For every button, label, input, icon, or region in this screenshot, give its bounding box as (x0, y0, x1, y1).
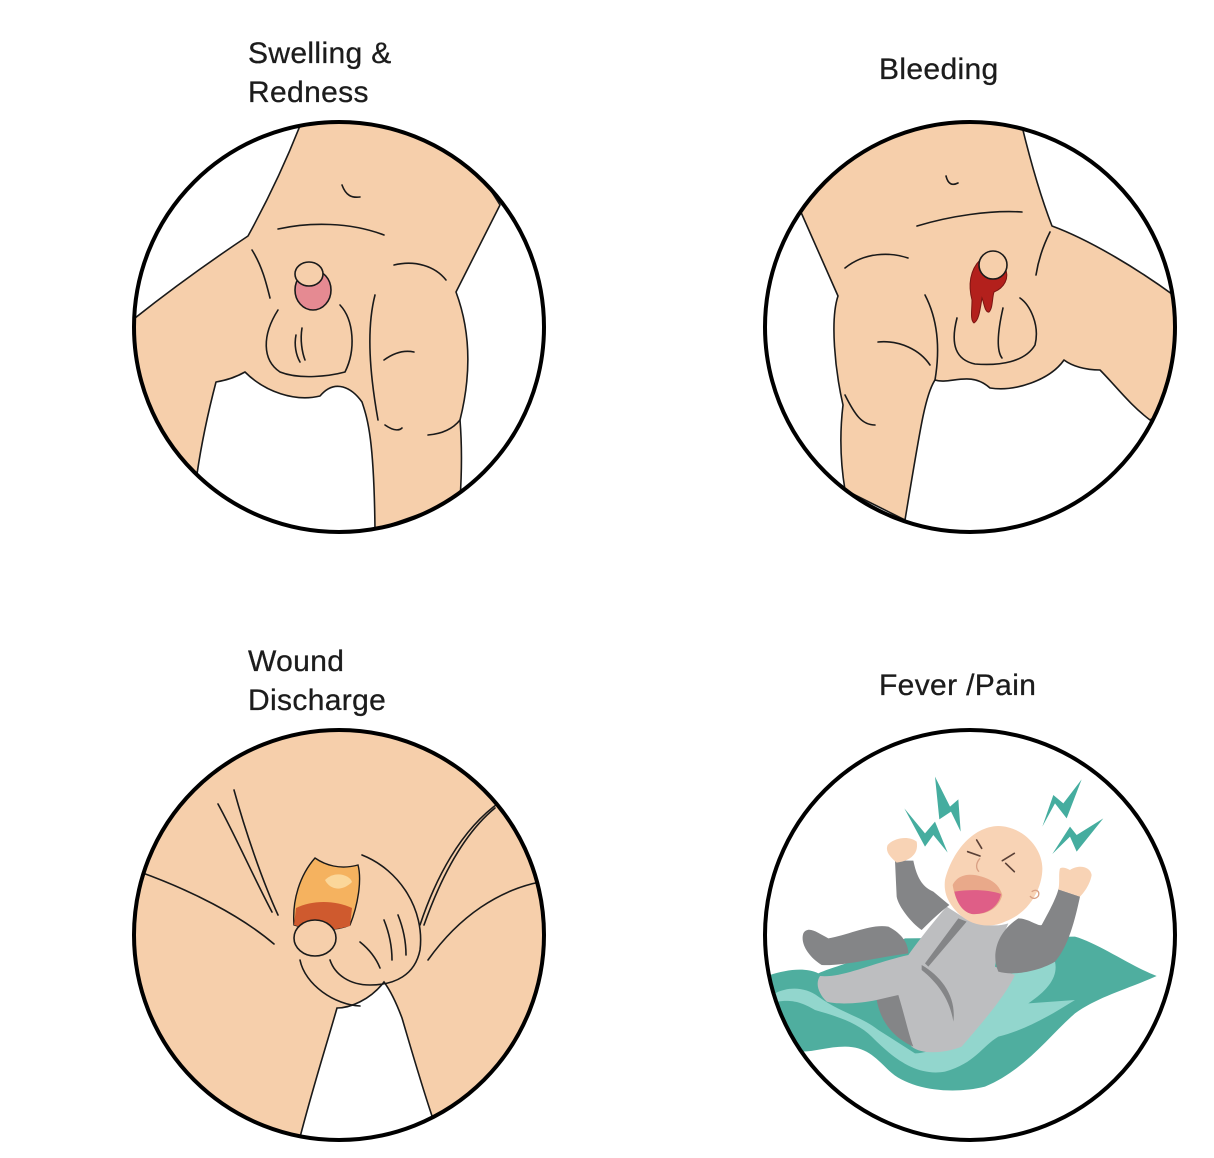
symptom marker: bleeding (970, 260, 1007, 323)
heading: wound discharge: Wound (248, 645, 344, 678)
icon: pain lightning bolts (904, 777, 1103, 854)
heading: fever and pain: Fever /Pain (879, 669, 1036, 702)
head (945, 826, 1042, 925)
illustration: infant lower body with discharge (130, 725, 550, 1145)
circle outline (765, 122, 1175, 532)
panel: wound discharge (130, 645, 550, 1145)
heading: swelling and redness: Swelling & (248, 37, 392, 70)
hands (887, 838, 1092, 897)
heading: wound discharge: Discharge (248, 684, 386, 717)
baby suit (803, 861, 1080, 1052)
blanket (770, 937, 1157, 1091)
heading: swelling and redness: Redness (248, 76, 369, 109)
panel: swelling and redness (130, 37, 544, 532)
panel: fever and pain (765, 669, 1175, 1140)
illustration: crying baby on blanket (770, 777, 1157, 1091)
circle outline (134, 730, 544, 1140)
symptom marker: discharge (294, 858, 360, 930)
circle outline (134, 122, 544, 532)
illustration: infant lower body with bleeding (800, 110, 1180, 520)
symptom marker: redness (295, 270, 331, 310)
illustration: infant lower body with redness (130, 110, 500, 530)
heading: bleeding: Bleeding (879, 53, 999, 86)
circle outline (765, 730, 1175, 1140)
panel: bleeding (765, 53, 1180, 532)
